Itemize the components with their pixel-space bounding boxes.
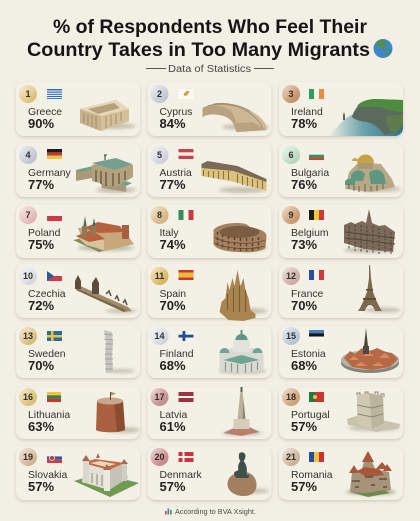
- rank badge: 12: [286, 271, 296, 281]
- panel: Germany: [16, 143, 140, 197]
- rank badge: 13: [23, 331, 33, 341]
- rank badge: 1: [25, 89, 31, 99]
- flag: [309, 270, 324, 280]
- country label: [28, 289, 66, 313]
- country label: [160, 410, 187, 434]
- country label: Lithuania: [28, 410, 70, 421]
- country label: 70%: [160, 298, 186, 313]
- country label: France: [291, 289, 324, 300]
- panel: Lithuania: [16, 387, 140, 439]
- country label: [28, 228, 61, 252]
- subtitle: [146, 64, 274, 75]
- panel: Estonia: [279, 326, 403, 378]
- panel: Slovakia: [16, 447, 140, 500]
- country label: 70%: [291, 298, 317, 313]
- country label: 68%: [160, 358, 186, 373]
- panel: Italy: [148, 204, 272, 258]
- rank badge: 14: [154, 331, 165, 341]
- flag: [309, 392, 324, 402]
- country label: Poland: [28, 228, 61, 239]
- country label: 73%: [291, 237, 317, 252]
- landmark: Eiffel Tower: [358, 265, 401, 312]
- rank badge: 15: [286, 331, 296, 341]
- country label: 57%: [28, 479, 54, 494]
- rank badge: 7: [25, 210, 31, 220]
- country label: Belgium: [291, 228, 329, 239]
- landmark: Alexander Nevsky Cathedral: [345, 154, 401, 192]
- flag: [47, 331, 62, 341]
- landmark: Helsinki Cathedral: [218, 330, 266, 374]
- country label: Czechia: [28, 289, 66, 300]
- rank badge: 20: [154, 452, 165, 462]
- landmark: Bran Castle: [346, 451, 396, 497]
- panel: Austria: [148, 143, 272, 197]
- country label: 72%: [28, 298, 54, 313]
- landmark: Colosseum: [214, 223, 268, 252]
- country label: 57%: [291, 419, 317, 434]
- country label: [160, 228, 186, 252]
- country label: [291, 289, 324, 313]
- panel: Romania: [279, 447, 403, 500]
- rank badge: 8: [157, 210, 162, 220]
- panel: Portugal: [279, 387, 403, 439]
- country label: 90%: [28, 116, 54, 131]
- country label: [291, 470, 333, 494]
- rank badge: 17: [154, 392, 165, 402]
- flag: [309, 152, 324, 160]
- panel: Poland: [16, 204, 140, 258]
- country label: Denmark: [160, 470, 202, 481]
- landmark: Parthenon: [80, 100, 136, 131]
- country label: [291, 410, 330, 434]
- rank badge: 10: [23, 271, 33, 281]
- flag: [178, 149, 194, 159]
- landmark: Charles Bridge: [75, 275, 137, 313]
- panel: Bulgaria: [279, 143, 403, 197]
- country label: 68%: [291, 358, 317, 373]
- panel: Spain: [148, 264, 272, 321]
- country label: 78%: [291, 116, 317, 131]
- landmark: Grand Place: [344, 209, 395, 254]
- country label: [28, 168, 72, 192]
- flag: [178, 210, 194, 220]
- icon: globe: [374, 39, 392, 58]
- country label: 57%: [291, 479, 317, 494]
- rank badge: 4: [25, 150, 31, 160]
- flag: [178, 270, 194, 280]
- country label: [291, 107, 323, 131]
- rank badge: 5: [157, 150, 162, 160]
- country label: Cyprus: [160, 107, 192, 118]
- country label: 76%: [291, 177, 317, 192]
- country label: [160, 289, 186, 313]
- flag: [178, 452, 194, 462]
- panel: Latvia: [148, 387, 272, 439]
- rank badge: 11: [155, 271, 164, 281]
- panel: Finland: [148, 326, 272, 378]
- country label: Bulgaria: [291, 168, 329, 179]
- panel: Belgium: [279, 204, 403, 258]
- flag: [309, 89, 324, 99]
- flag: [47, 149, 62, 159]
- country label: [160, 349, 194, 373]
- landmark: Gediminas Tower: [96, 392, 140, 433]
- rank badge: 3: [288, 89, 294, 99]
- country label: Estonia: [291, 349, 326, 360]
- panel: Sweden: [16, 326, 140, 378]
- country label: 77%: [28, 177, 54, 192]
- country label: [160, 107, 192, 131]
- landmark: Schönbrunn Palace: [202, 161, 266, 193]
- landmark: Bratislava Castle: [74, 453, 139, 497]
- country label: 77%: [160, 177, 186, 192]
- panel: Czechia: [16, 264, 140, 318]
- landmark: Little Mermaid: [228, 452, 270, 496]
- country label: Slovakia: [28, 470, 67, 481]
- panel: Denmark: [148, 447, 272, 500]
- landmark: Brandenburg Gate: [76, 155, 136, 193]
- country label: [291, 228, 329, 252]
- title: [27, 16, 370, 61]
- flag: [47, 392, 61, 402]
- country label: Latvia: [160, 410, 187, 421]
- country label: Portugal: [291, 410, 330, 421]
- panel: Ireland: [279, 82, 403, 136]
- country label: 75%: [28, 237, 54, 252]
- flag: [309, 452, 324, 462]
- rank badge: 6: [288, 150, 294, 160]
- flag: [47, 453, 62, 463]
- subtitle: Data of Statistics: [168, 64, 251, 75]
- panel: Cyprus: [148, 82, 272, 136]
- landmark: Wawel Castle: [73, 216, 134, 252]
- country label: Spain: [160, 289, 186, 300]
- landmark: Kourion amphitheatre: [202, 103, 270, 132]
- country label: [160, 470, 202, 494]
- panel: France: [279, 264, 403, 318]
- country label: Romania: [291, 470, 333, 481]
- country label: Ireland: [291, 107, 323, 118]
- flag: [178, 89, 194, 99]
- country label: [28, 470, 67, 494]
- flag: [309, 330, 324, 340]
- country label: Sweden: [28, 349, 66, 360]
- country label: Austria: [160, 168, 192, 179]
- landmark: Tallinn Old Town: [341, 328, 399, 373]
- country label: 74%: [160, 237, 186, 252]
- rank badge: 21: [286, 452, 296, 462]
- landmark: Freedom Monument: [222, 387, 262, 436]
- country label: Germany: [28, 168, 72, 179]
- flag: [47, 271, 62, 281]
- flag: [309, 210, 324, 220]
- rank badge: 2: [157, 89, 162, 99]
- rank badge: 19: [23, 452, 33, 462]
- landmark: Belem Tower: [347, 392, 400, 432]
- landmark: Turning Torso: [104, 330, 135, 373]
- country label: [28, 107, 62, 131]
- rank badge: 9: [288, 210, 294, 220]
- flag: [178, 331, 194, 341]
- flag: [178, 392, 194, 402]
- country label: 70%: [28, 358, 54, 373]
- country label: [291, 349, 326, 373]
- country label: Finland: [160, 349, 194, 360]
- country label: 61%: [160, 419, 186, 434]
- country label: [291, 168, 329, 192]
- country label: Greece: [28, 107, 62, 118]
- country label: [28, 349, 66, 373]
- country label: 63%: [28, 419, 54, 434]
- title: % of Respondents Who Feel Their: [53, 16, 367, 38]
- country label: [28, 410, 70, 434]
- country label: 57%: [160, 479, 186, 494]
- country label: [160, 168, 192, 192]
- rank badge: 16: [23, 392, 33, 402]
- source note: According to BVA Xsight.: [175, 509, 256, 516]
- country label: 84%: [160, 116, 186, 131]
- rank badge: 18: [286, 392, 296, 402]
- landmark: Cliffs of Moher: [328, 99, 403, 136]
- panel: Greece: [16, 82, 140, 136]
- title: Country Takes in Too Many Migrants: [27, 39, 370, 61]
- country label: Italy: [160, 228, 179, 239]
- landmark: Sagrada Familia: [220, 270, 268, 321]
- flag: [47, 211, 62, 221]
- flag: [47, 89, 62, 99]
